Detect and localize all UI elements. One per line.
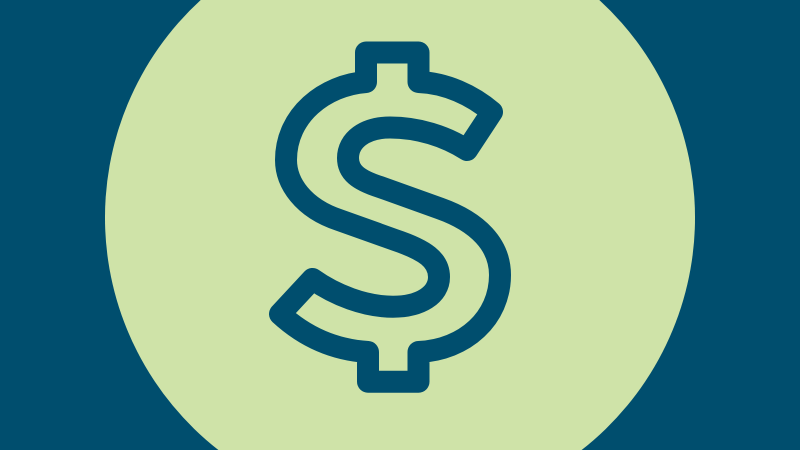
light green circle — [105, 0, 695, 450]
icon: dollar sign outline — [280, 52, 500, 382]
